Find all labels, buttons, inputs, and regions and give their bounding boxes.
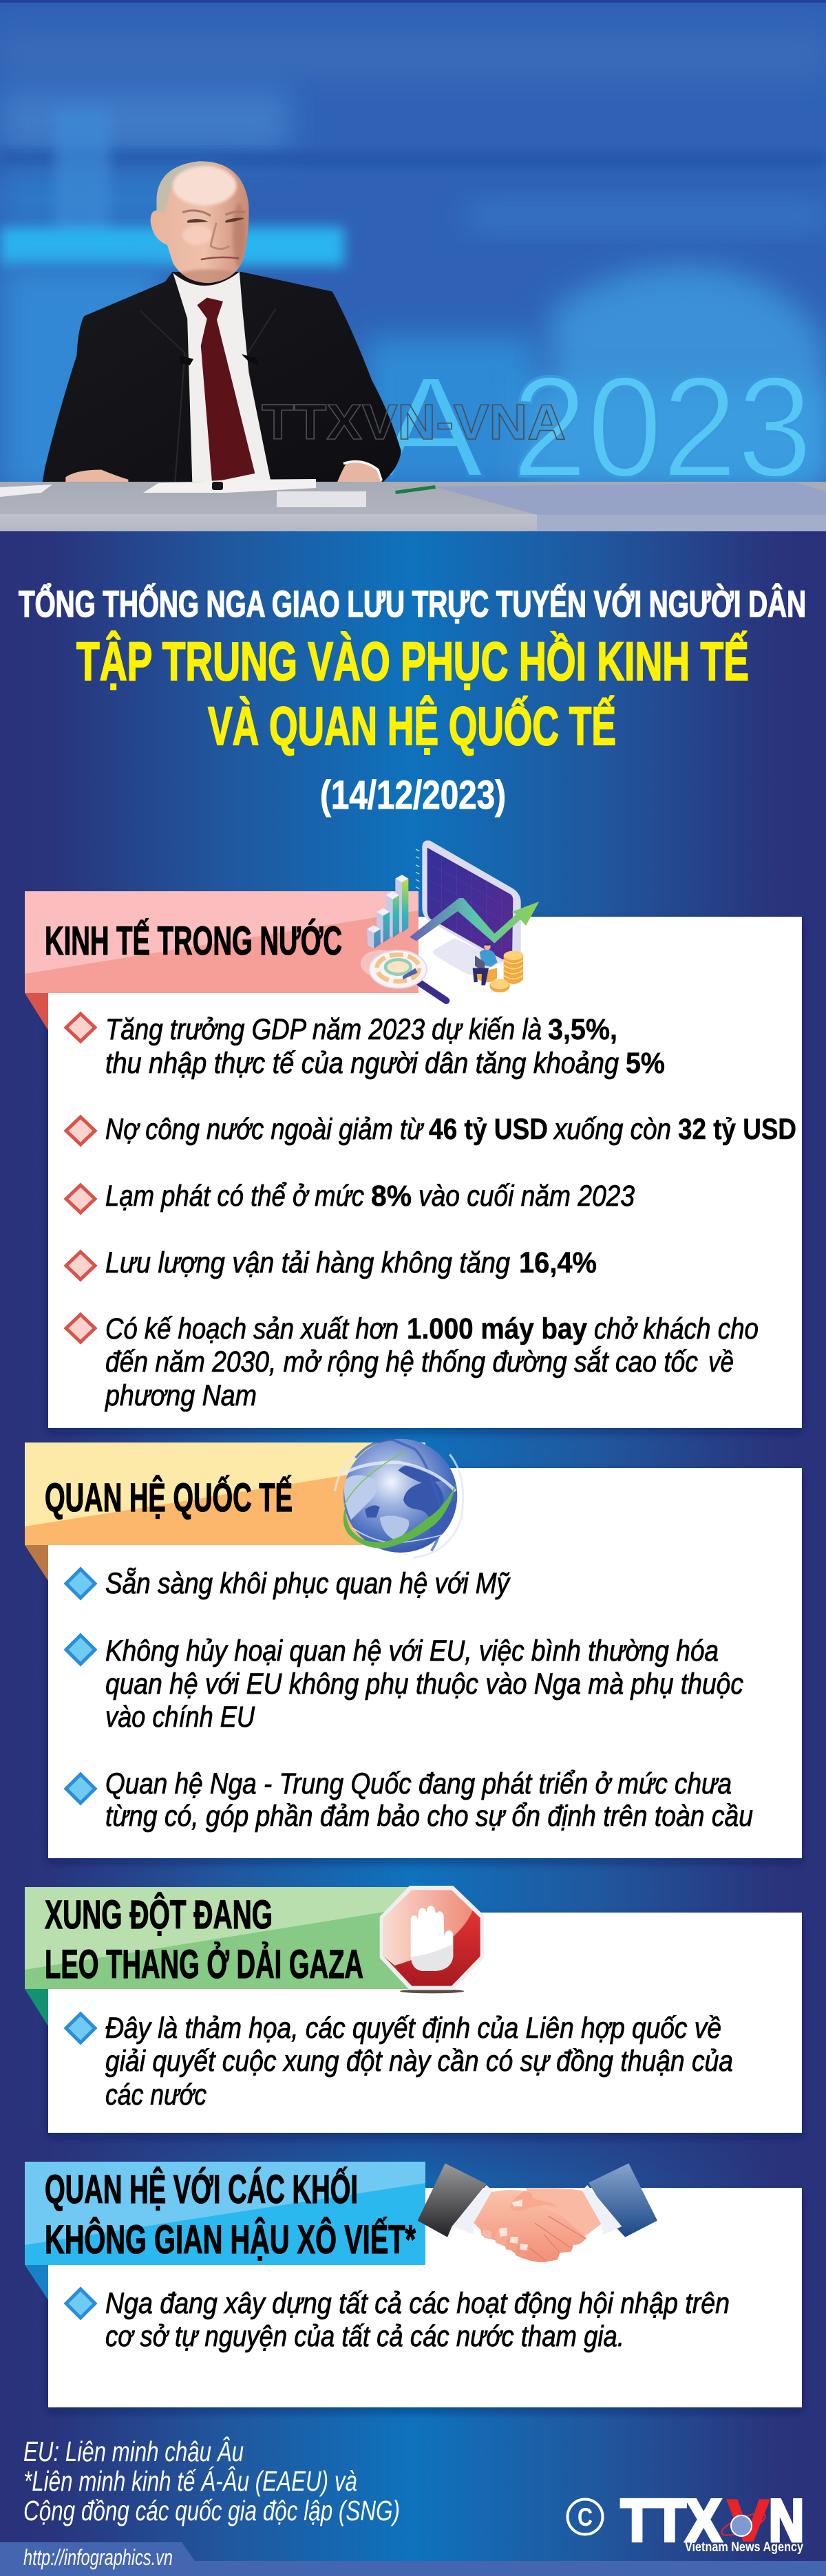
logo: TTXVN — [621, 2488, 804, 2555]
bullet: UN decisions: giải quyết cuộc xung đột này cần có sự đồng thuận của — [105, 2045, 733, 2078]
footnotes — [23, 2436, 400, 2526]
header ribbon — [25, 1443, 425, 1581]
bullet: aircraft and rail: đến năm 2030, mở rộng hệ thống đường sắt cao tốc — [105, 1345, 698, 1379]
bullet: voluntary integration: Nga đang xây dựng tất cả các hoạt động hội nhập trên — [105, 2287, 730, 2320]
bullet: EU relations — [66, 1635, 743, 1734]
bullet: GDP: 5% — [626, 1047, 665, 1080]
icon: stop hand sign — [380, 1886, 484, 1993]
panel: post-Soviet blocs — [25, 2162, 802, 2407]
panel body — [48, 2188, 802, 2407]
footer bar with url — [0, 2542, 826, 2576]
bullet: aircraft and rail: 1.000 máy bay — [407, 1312, 587, 1345]
logo: TTXVN: N — [769, 2488, 804, 2554]
bullet: EU relations: vào chính EU — [105, 1701, 255, 1734]
bullet: GDP: 3,5%, — [548, 1013, 617, 1046]
bullet: aircraft and rail — [66, 1312, 759, 1412]
panel body — [48, 1468, 802, 1858]
logo: copyright mark: C — [578, 2503, 593, 2531]
Africa and Europe — [403, 1482, 444, 1517]
person with laptop — [473, 943, 498, 986]
bullet: aircraft and rail: Có kế hoạch sản xuất hơn — [105, 1312, 399, 1345]
person: tie — [197, 297, 255, 481]
Americas — [344, 1475, 378, 1520]
bullet: public debt: 46 tỷ USD — [429, 1113, 548, 1146]
fingers — [482, 2230, 492, 2239]
studio text 2023: 2023 — [512, 348, 812, 507]
bullet: GDP: thu nhập thực tế của người dân tăng khoảng — [105, 1047, 619, 1080]
chart bars — [367, 875, 408, 948]
footer bar with url: http://infographics.vn — [23, 2545, 173, 2570]
header ribbon — [25, 1887, 410, 2026]
icon: monitor with growth chart — [361, 840, 539, 1001]
heading: KINH TẾ TRONG NƯỚC — [45, 919, 342, 964]
person: shirt — [173, 272, 271, 482]
bullet: EU relations: quan hệ với EU không phụ thuộc vào Nga mà phụ thuộc — [105, 1668, 743, 1701]
logo: copyright mark — [567, 2500, 603, 2534]
title line 3: VÀ QUAN HỆ QUỐC TẾ — [208, 695, 616, 756]
bullet: UN decisions: Đây là thảm họa, các quyết định của Liên hợp quốc về — [105, 2012, 721, 2045]
bullet: GDP: Tăng trưởng GDP năm 2023 dự kiến là — [105, 1013, 542, 1046]
header ribbon — [25, 891, 419, 1030]
bullet: UN decisions — [66, 2012, 733, 2111]
bullet: public debt — [66, 1113, 796, 1146]
bullet: US relations: Sẵn sàng khôi phục quan hệ với Mỹ — [105, 1567, 511, 1600]
bullet: aircraft and rail: phương Nam — [104, 1379, 257, 1412]
bullet: public debt: 32 tỷ USD — [678, 1113, 796, 1146]
header ribbon — [25, 2162, 425, 2300]
icon: globe — [335, 1439, 463, 1557]
bullet: GDP — [66, 1013, 665, 1080]
bullet: voluntary integration — [66, 2287, 730, 2353]
panel: domestic economy — [25, 840, 802, 1428]
bullet: UN decisions: các nước — [105, 2078, 206, 2111]
person: suit — [42, 160, 401, 484]
logo: TTXVN: V — [727, 2488, 770, 2554]
table — [0, 479, 826, 531]
bullet: air cargo: 16,4% — [519, 1246, 597, 1279]
bullet: inflation: Lạm phát có thể ở mức — [105, 1180, 364, 1213]
icon: handshake — [418, 2163, 657, 2262]
footnotes: *Liên minh kinh tế Á-Âu (EAEU) và — [23, 2465, 357, 2497]
clasped hand — [474, 2190, 586, 2262]
bullet: voluntary integration: cơ sở tự nguyện của tất cả các nước tham gia. — [105, 2320, 624, 2353]
bullet: China relations: Quan hệ Nga - Trung Quốc đang phát triển ở mức chưa — [105, 1767, 732, 1800]
heading: QUAN HỆ QUỐC TẾ — [45, 1476, 293, 1520]
bullet: aircraft and rail: về — [708, 1345, 734, 1379]
person: microphones — [180, 354, 259, 365]
panel body — [48, 1913, 802, 2133]
studio text 2023: A — [377, 348, 484, 507]
footnotes: EU: Liên minh châu Âu — [23, 2436, 244, 2467]
bullet: public debt: xuống còn — [553, 1113, 671, 1146]
panel body — [48, 917, 802, 1428]
bullet: EU relations: Không hủy hoại quan hệ với EU, việc bình thường hóa — [105, 1635, 719, 1668]
coins — [477, 951, 523, 992]
bullet: public debt: Nợ công nước ngoài giảm từ — [105, 1113, 424, 1146]
watermark TTXVN-VNA: TTXVN-VNA — [262, 395, 566, 450]
panel: international relations — [25, 1439, 802, 1858]
heading — [45, 2167, 416, 2262]
bullet: inflation: vào cuối năm 2023 — [419, 1180, 635, 1213]
magnifier — [370, 950, 446, 1001]
bullet: inflation — [66, 1180, 635, 1213]
title — [19, 583, 806, 818]
person: hands — [65, 469, 128, 482]
bullet: air cargo: Lưu lượng vận tải hàng không tăng — [105, 1246, 510, 1279]
heading: XUNG ĐỘT ĐANG — [45, 1893, 273, 1937]
orbit rings — [356, 1440, 441, 1551]
hero photo — [0, 0, 826, 531]
logo: TTXVN: TTX — [621, 2488, 721, 2554]
date: (14/12/2023) — [320, 773, 506, 818]
heading: KHÔNG GIAN HẬU XÔ VIẾT* — [45, 2217, 416, 2262]
footnotes: Cộng đồng các quốc gia độc lập (SNG) — [23, 2495, 400, 2526]
studio text 2023 — [388, 374, 805, 479]
heading — [45, 1893, 363, 1987]
bullet: China relations — [66, 1767, 753, 1833]
logo: TTXVN: Vietnam News Agency — [685, 2540, 803, 2555]
bullet: aircraft and rail: chở khách cho — [594, 1312, 759, 1345]
heading: LEO THANG Ở DẢI GAZA — [45, 1942, 363, 1987]
heading: QUAN HỆ VỚI CÁC KHỐI — [45, 2167, 358, 2212]
person: head — [151, 160, 248, 284]
panel: Gaza conflict — [25, 1886, 802, 2133]
right hand back — [525, 2188, 601, 2244]
thumb — [509, 2191, 558, 2211]
bullet: inflation: 8% — [371, 1180, 412, 1213]
